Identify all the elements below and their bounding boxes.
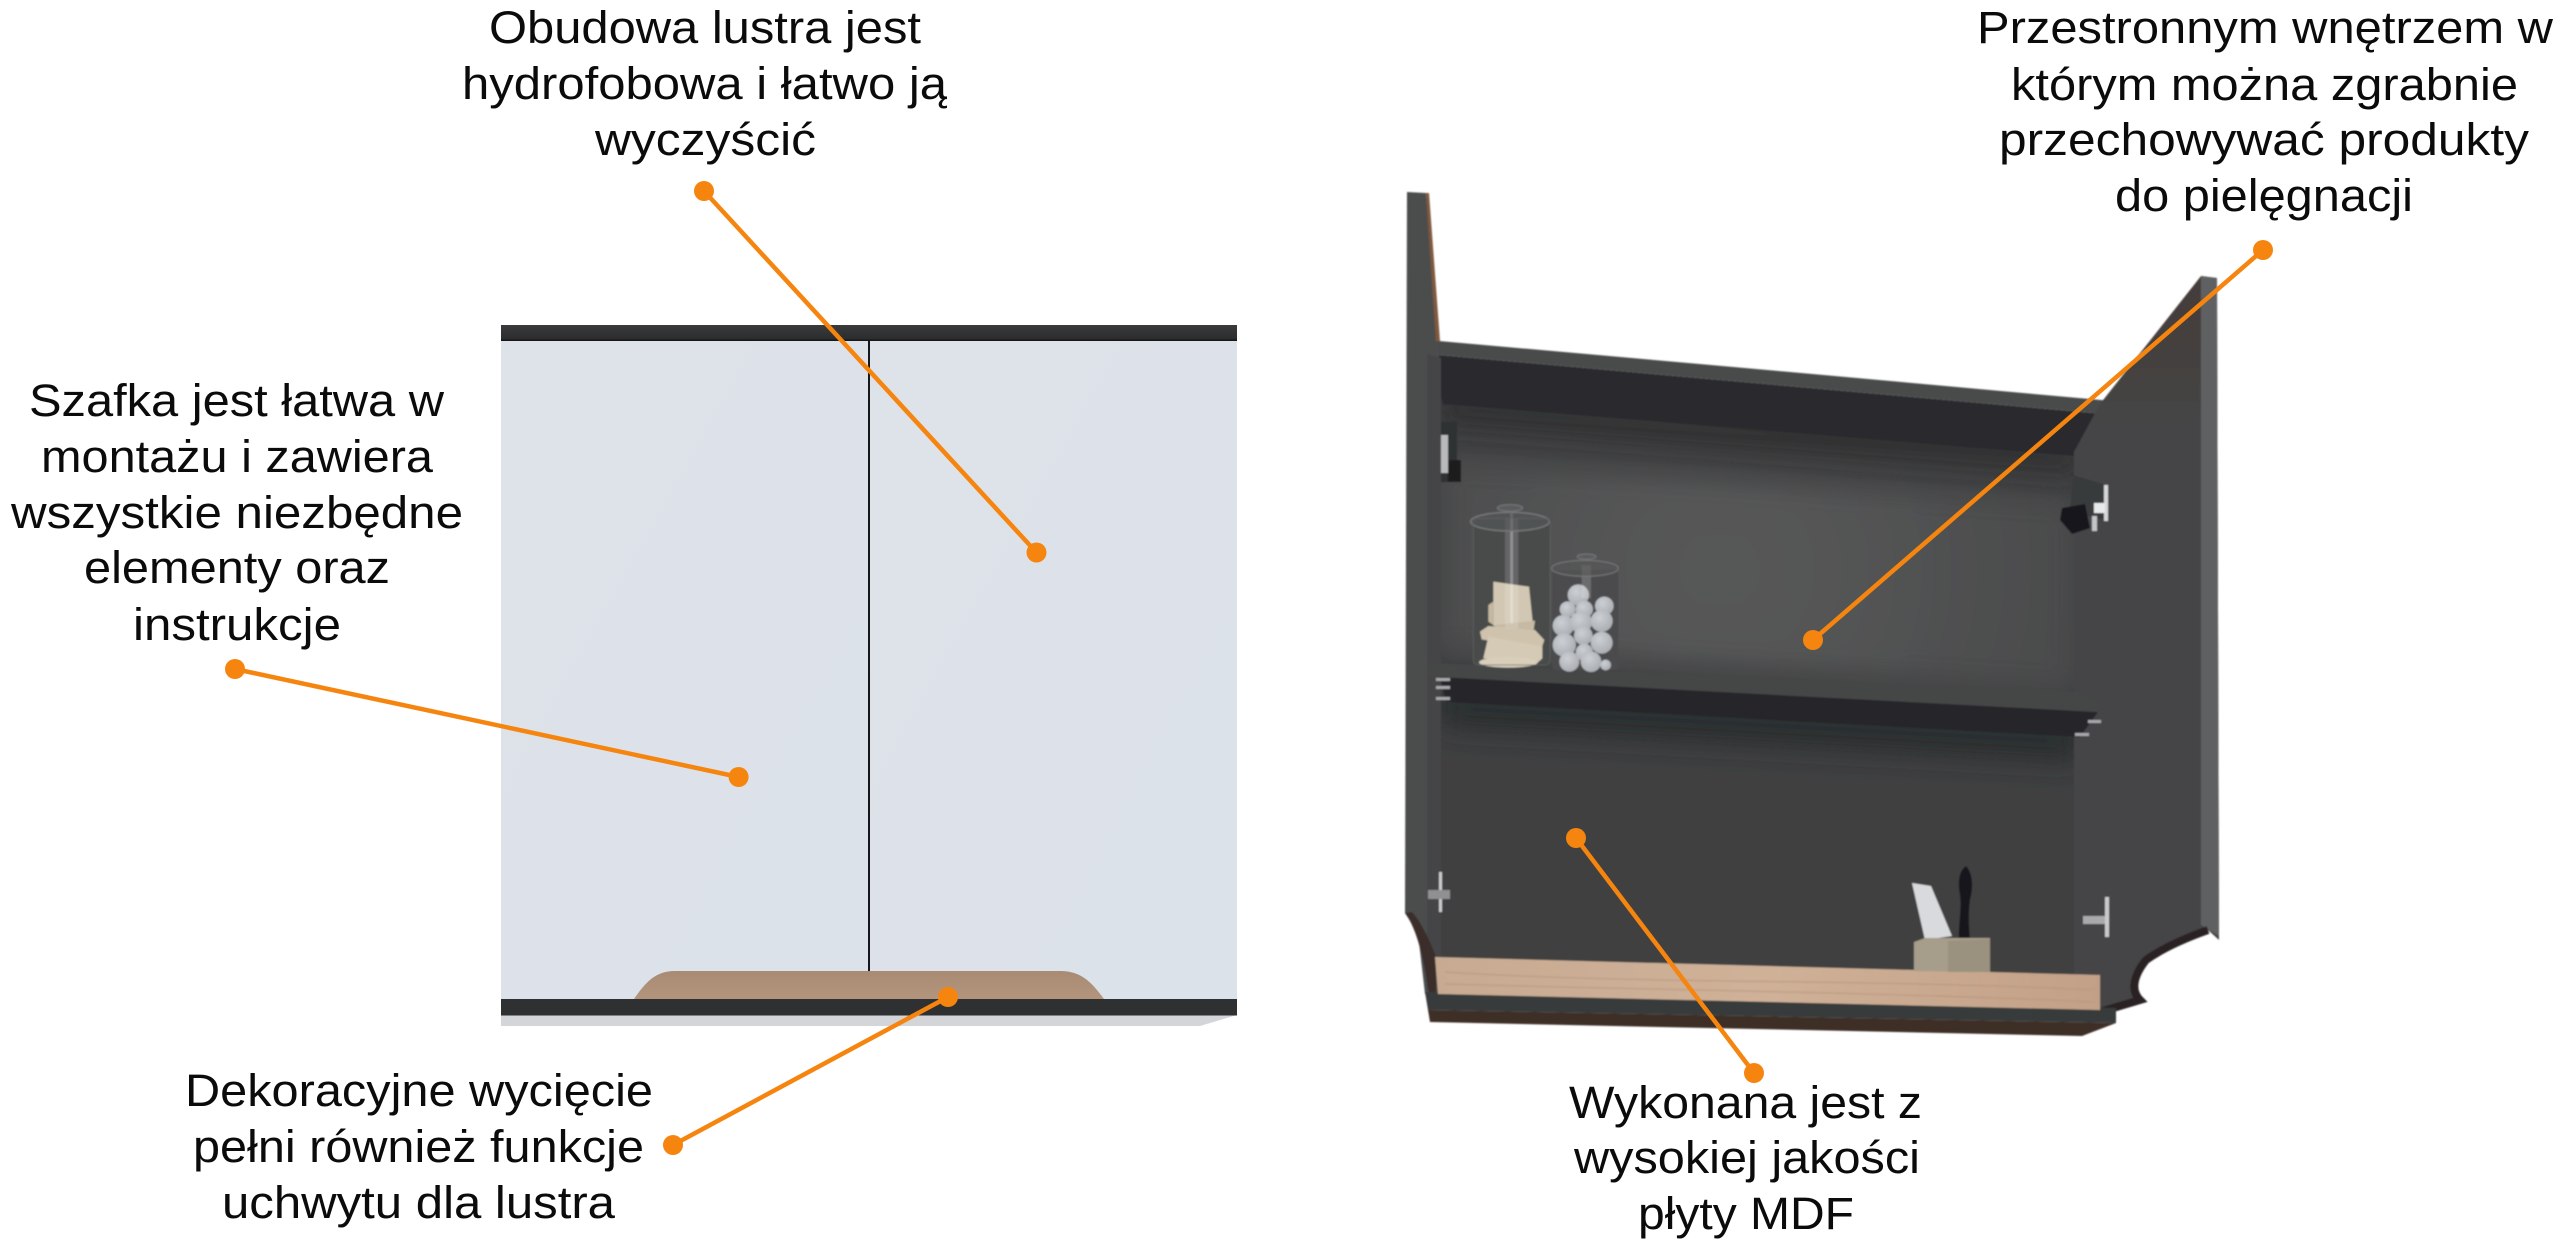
leader line: cut-out [663, 987, 958, 1155]
text block: interior [1977, 2, 2554, 221]
left door darker inner strip [1427, 354, 1441, 1000]
icon: upper right hinge [2060, 475, 2108, 534]
text block: assembly: elementy oraz [84, 542, 390, 593]
text block: assembly: montażu i zawiera [41, 431, 434, 482]
text block: material: Wykonana jest z [1569, 1077, 1922, 1128]
wood grain [1445, 972, 2095, 1002]
text block: material: wysokiej jakości [1573, 1132, 1920, 1183]
right mirror door [869, 340, 1237, 1000]
icon: right shelf pegs [2075, 720, 2101, 736]
text block: assembly: instrukcje [133, 599, 341, 650]
right door curved cut-out [2103, 930, 2208, 1011]
left door curved cut-out [1405, 912, 1436, 1002]
text block: interior: do pielęgnacji [2115, 170, 2413, 221]
bottom dark band [501, 999, 1237, 1016]
icon: left shelf pegs [1436, 678, 1450, 700]
callout: decorative cut-out [185, 987, 958, 1228]
text block: assembly [10, 375, 463, 650]
callout: housing is hydrophobic [462, 2, 1046, 562]
text block: material: płyty MDF [1638, 1188, 1854, 1239]
decorative oak cut-out handle [634, 971, 1104, 999]
back wall [1432, 395, 2080, 995]
text block: housing: Obudowa lustra jest [489, 2, 922, 53]
wooden lower panel [1435, 957, 2100, 1010]
grey lower edge of cabinet [501, 1015, 1237, 1026]
icon: large jar with soap [1471, 505, 1550, 668]
text block: cut-out: uchwytu dla lustra [222, 1177, 616, 1228]
top panel front edge [1428, 341, 2112, 414]
gap between doors [868, 340, 870, 971]
text block: interior: którym można zgrabnie [2011, 59, 2518, 110]
icon: lower right hinge [2083, 897, 2109, 937]
icon: lower left hinge [1428, 872, 1450, 912]
icon: upper left hinge [1441, 422, 1461, 482]
shelf underside [1440, 677, 2098, 737]
icon: black brush [1959, 866, 1972, 940]
text block: cut-out: Dekoracyjne wycięcie [185, 1065, 653, 1116]
icon: white cosmetic tube [1912, 883, 1952, 940]
text block: housing [462, 2, 948, 165]
text block: cut-out [185, 1065, 653, 1228]
bottom panel top face [1425, 992, 2116, 1023]
shadows under top panel and shelf [1440, 395, 2080, 760]
callout: spacious interior [1803, 2, 2554, 650]
upper back wall light [1440, 460, 2076, 690]
icon: small jar with white balls [1552, 554, 1618, 672]
leader line: housing [694, 181, 1046, 562]
icon: woven box [1914, 938, 1990, 972]
text block: assembly: wszystkie niezbędne [10, 487, 463, 538]
text block: cut-out: pełni również funkcje [193, 1121, 644, 1172]
shelf top surface [1427, 663, 2099, 712]
leader line: material [1566, 828, 1764, 1083]
callout: MDF material [1566, 828, 1922, 1239]
panel: open cabinet interior view [1405, 192, 2219, 1036]
text block: interior: przechowywać produkty [1999, 114, 2530, 165]
callout: easy assembly [10, 375, 749, 787]
text block: material [1569, 1077, 1922, 1239]
right door front edge [2201, 276, 2219, 936]
top dark band [501, 325, 1237, 341]
bottom panel underside [1428, 1010, 2116, 1036]
right door inner side [2074, 276, 2219, 1012]
leader line: interior [1803, 240, 2273, 650]
leader line: assembly [225, 659, 749, 787]
left door oak edge [1426, 193, 1440, 341]
left mirror door [501, 340, 869, 1000]
panel: front view of closed mirror cabinet [501, 325, 1237, 1026]
text block: interior: Przestronnym wnętrzem w [1977, 2, 2554, 53]
left door inner side [1405, 192, 1441, 1000]
text block: assembly: Szafka jest łatwa w [29, 375, 445, 426]
text block: housing: wyczyścić [594, 114, 816, 165]
text block: housing: hydrofobowa i łatwo ją [462, 58, 948, 109]
top panel underside [1428, 354, 2104, 456]
